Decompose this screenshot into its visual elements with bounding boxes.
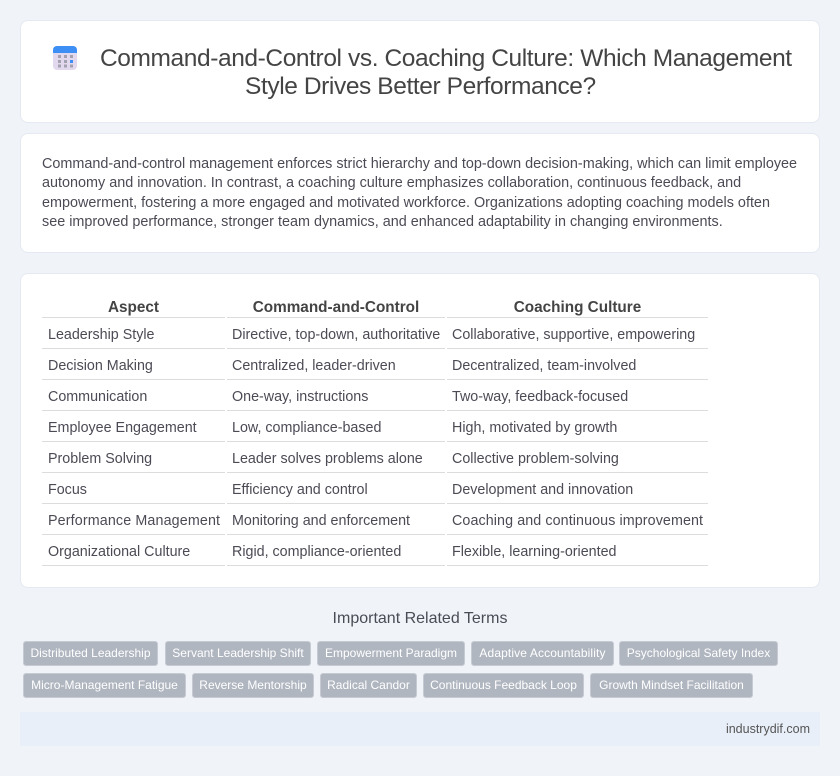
tags: related terms: Servant Leadership Shift <box>172 646 304 660</box>
text: description: empowerment, fostering a more engaged and motivated workforce. Organizations adopting coaching models often <box>42 195 770 211</box>
table rows: Problem Solving <box>48 451 152 467</box>
tags: related terms: Continuous Feedback Loop <box>430 678 577 692</box>
footer source: industrydif.com <box>726 722 810 736</box>
table header: Command-and-Control <box>253 299 419 316</box>
table rows: Communication <box>48 389 147 405</box>
table rows: Decentralized, team-involved <box>452 358 636 374</box>
tags: related terms: Adaptive Accountability <box>479 646 606 660</box>
table header: Coaching Culture <box>514 299 641 316</box>
table rows: Leadership Style <box>48 327 155 343</box>
table rows: Collective problem-solving <box>452 451 619 467</box>
tags: related terms: Growth Mindset Facilitation <box>599 678 744 692</box>
title: Command-and-Control vs. Coaching Culture: Which Management <box>100 45 792 72</box>
footer bar <box>20 712 820 746</box>
table rows: Monitoring and enforcement <box>232 513 410 529</box>
table rows: Organizational Culture <box>48 544 190 560</box>
table header: Aspect <box>108 299 159 316</box>
text: description: Command-and-control management enforces strict hierarchy and top-down decision-making, which can limit employee <box>42 156 797 172</box>
tags: related terms: Micro-Management Fatigue <box>31 678 178 692</box>
table rows: Two-way, feedback-focused <box>452 389 628 405</box>
table rows: Efficiency and control <box>232 482 368 498</box>
tags: related terms: Radical Candor <box>327 678 410 692</box>
table rows: Rigid, compliance-oriented <box>232 544 401 560</box>
table rows: Focus <box>48 482 87 498</box>
panel: description <box>20 133 820 253</box>
table rows: Directive, top-down, authoritative <box>232 327 440 343</box>
table rows: Flexible, learning-oriented <box>452 544 617 560</box>
heading: related terms: Important Related Terms <box>333 610 507 627</box>
icon: calendar <box>53 46 77 70</box>
table rows: Leader solves problems alone <box>232 451 423 467</box>
table rows: One-way, instructions <box>232 389 368 405</box>
table rows: Collaborative, supportive, empowering <box>452 327 695 343</box>
table rows: Coaching and continuous improvement <box>452 513 703 529</box>
panel: header <box>20 20 820 123</box>
panel: comparison table <box>20 273 820 588</box>
table rows: Development and innovation <box>452 482 633 498</box>
text: description: autonomy and innovation. In contrast, a coaching culture emphasizes collaboration, continuous feedback, and <box>42 175 741 191</box>
table rows: Performance Management <box>48 513 220 529</box>
table rows: Employee Engagement <box>48 420 197 436</box>
tags: related terms: Reverse Mentorship <box>199 678 307 692</box>
tags: related terms: Empowerment Paradigm <box>325 646 457 660</box>
title: Style Drives Better Performance? <box>245 73 596 100</box>
text: description <box>42 156 797 230</box>
title <box>100 45 792 100</box>
table rows: Low, compliance-based <box>232 420 381 436</box>
table rows: High, motivated by growth <box>452 420 617 436</box>
tags: related terms <box>23 641 778 698</box>
table rows: Decision Making <box>48 358 153 374</box>
table rows: Centralized, leader-driven <box>232 358 396 374</box>
table header <box>108 299 641 316</box>
tags: related terms: Psychological Safety Index <box>627 646 770 660</box>
table rows <box>42 317 708 566</box>
text: description: see improved performance, stronger team dynamics, and enhanced adaptability in changing environments. <box>42 214 723 230</box>
tags: related terms: Distributed Leadership <box>30 646 151 660</box>
